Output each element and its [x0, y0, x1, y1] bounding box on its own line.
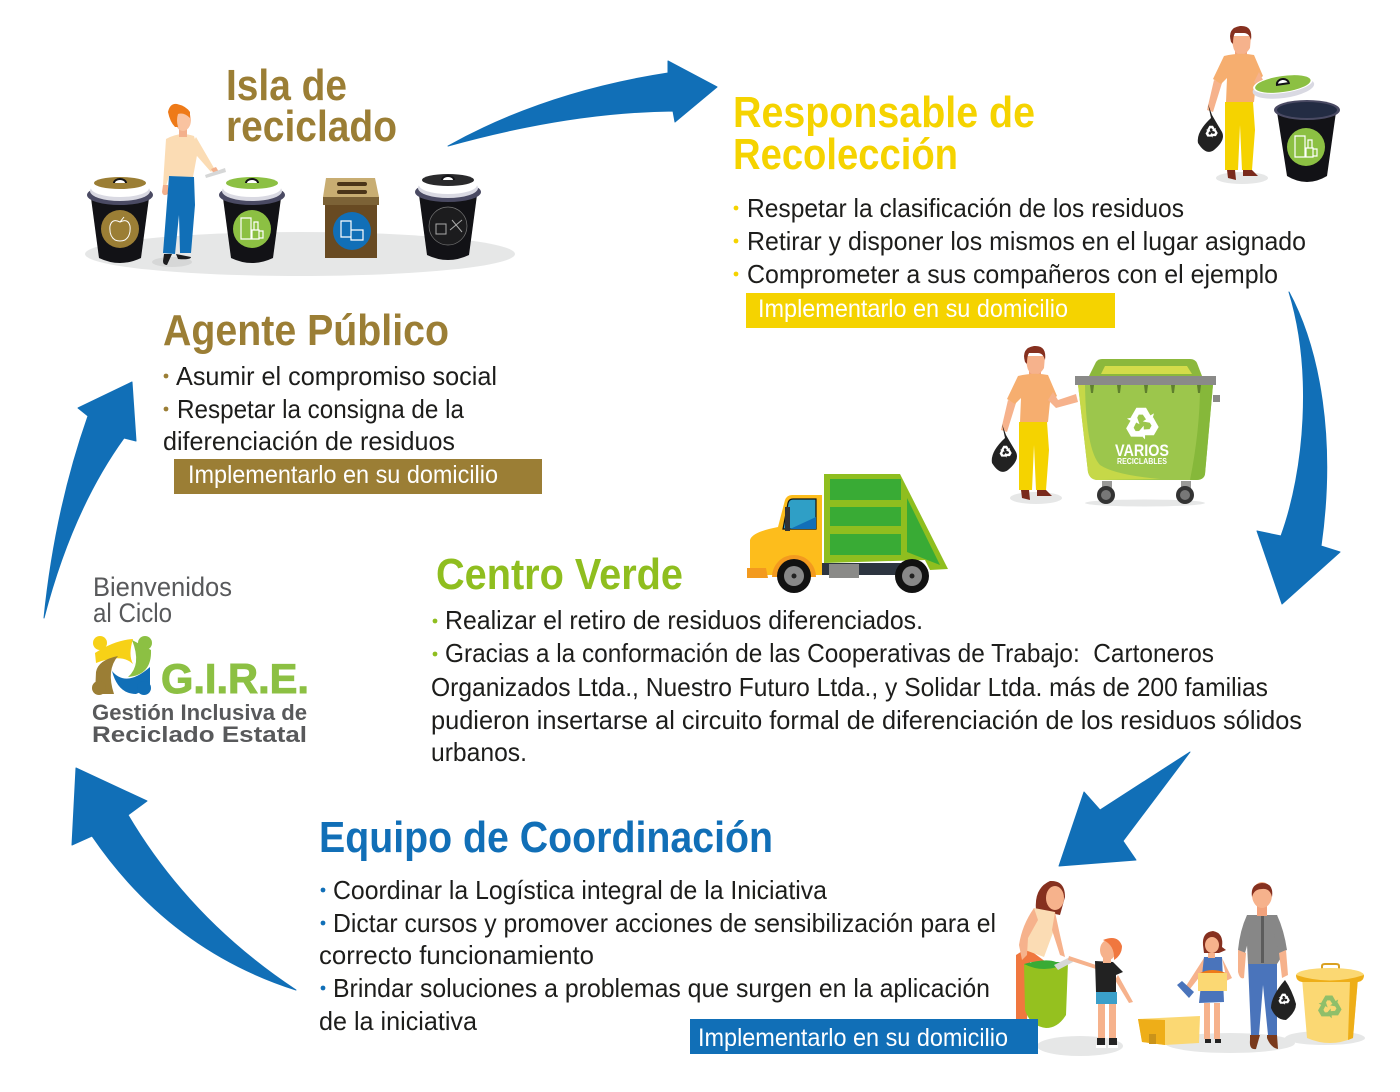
bullet list: urbanos.: [431, 737, 527, 767]
bullet list: Dictar cursos y promover acciones de sensibilización para el: [333, 908, 996, 938]
banner: Implementarlo en su domicilio: [698, 1024, 1008, 1052]
bullet list: Organizados Ltda., Nuestro Futuro Ltda., y Solidar Ltda. más de 200 familias: [431, 672, 1268, 702]
logo tagline: Reciclado Estatal: [92, 722, 307, 747]
bullet list: Coordinar la Logística integral de la Iniciativa: [333, 875, 828, 905]
logo tagline: Gestión Inclusiva de: [92, 700, 307, 725]
illustration: family recycling: [1016, 881, 1365, 1056]
heading: Isla de reciclado: [226, 61, 397, 151]
heading: [733, 88, 1035, 179]
bullet list: pudieron insertarse al circuito formal de diferenciación de los residuos sólidos: [431, 705, 1302, 735]
heading: Centro Verde: [436, 550, 683, 599]
logo tagline: [92, 700, 307, 747]
bin: recyclables: [219, 177, 285, 263]
illustration: man opening bin: [1198, 26, 1340, 184]
bullet list: Asumir el compromiso social: [176, 361, 497, 391]
box: paper and cardboard: [323, 178, 379, 258]
woman with bag: [1016, 881, 1073, 1028]
bin: organic: [87, 177, 153, 263]
bullet list: Realizar el retiro de residuos diferenciados.: [445, 605, 923, 635]
figure: woman: [152, 104, 226, 267]
container: [1075, 359, 1220, 504]
heading: Equipo de Coordinación: [319, 813, 773, 862]
heading: Isla de reciclado: reciclado: [226, 102, 397, 151]
bin: general waste: [415, 174, 481, 260]
arrow: top: [448, 61, 717, 146]
bullet list: [319, 875, 996, 1036]
arrow: bottom left: [72, 768, 296, 990]
bullet list: Retirar y disponer los mismos en el lugar asignado: [747, 226, 1306, 256]
yellow bin: [1296, 964, 1364, 1043]
heading: Agente Público: [163, 306, 449, 355]
welcome text: [93, 572, 232, 628]
man with bag: [1238, 882, 1296, 1049]
bullet list: correcto funcionamiento: [319, 940, 594, 970]
logo mark: [92, 636, 152, 695]
heading: Isla de reciclado: Isla de: [226, 61, 347, 110]
bullet list: Respetar la clasificación de los residuos: [747, 193, 1184, 223]
bullet list: Gracias a la conformación de las Cooperativas de Trabajo: Cartoneros: [445, 638, 1214, 668]
welcome text: al Ciclo: [93, 598, 172, 628]
panel: Equipo de Coordinación: [319, 813, 1038, 1054]
banner: Implementarlo en su domicilio: [758, 295, 1068, 323]
heading: Recolección: [733, 130, 958, 179]
bullet list: [734, 193, 1306, 289]
bullet list: de la iniciativa: [319, 1006, 478, 1036]
girl: [1177, 931, 1232, 1043]
lid: [1251, 71, 1316, 102]
illustration: man with container: [992, 346, 1220, 506]
arrow: left: [44, 382, 136, 618]
illustration: recycling island: [85, 104, 515, 276]
logo wordmark: G.I.R.E.: [161, 655, 309, 702]
banner: Implementarlo en su domicilio: [188, 461, 498, 489]
heading: Responsable de: [733, 88, 1035, 137]
bullet list: [431, 605, 1302, 767]
panel: Centro Verde: [431, 550, 1302, 767]
panel: Agente Público: [163, 306, 542, 494]
boy: [1068, 938, 1133, 1048]
bullet list: Comprometer a sus compañeros con el ejemplo: [747, 259, 1278, 289]
bullet list: diferenciación de residuos: [163, 426, 455, 456]
arrow: right: [1257, 292, 1340, 604]
panel: Responsable de Recolección: [733, 88, 1306, 328]
container: VARIOS: [1115, 441, 1169, 460]
illustration: garbage truck: [747, 474, 948, 593]
bullet list: Brindar soluciones a problemas que surgen en la aplicación: [333, 973, 990, 1003]
welcome text: Bienvenidos: [93, 572, 232, 602]
bullet list: [163, 361, 497, 456]
logo: G.I.R.E.: [92, 636, 309, 747]
cardboard box: [1138, 1016, 1200, 1045]
bullet list: Respetar la consigna de la: [177, 394, 464, 424]
open bin: [1274, 100, 1340, 182]
container: RECICLABLES: [1117, 457, 1168, 466]
arrow: bottom right: [1059, 752, 1190, 866]
